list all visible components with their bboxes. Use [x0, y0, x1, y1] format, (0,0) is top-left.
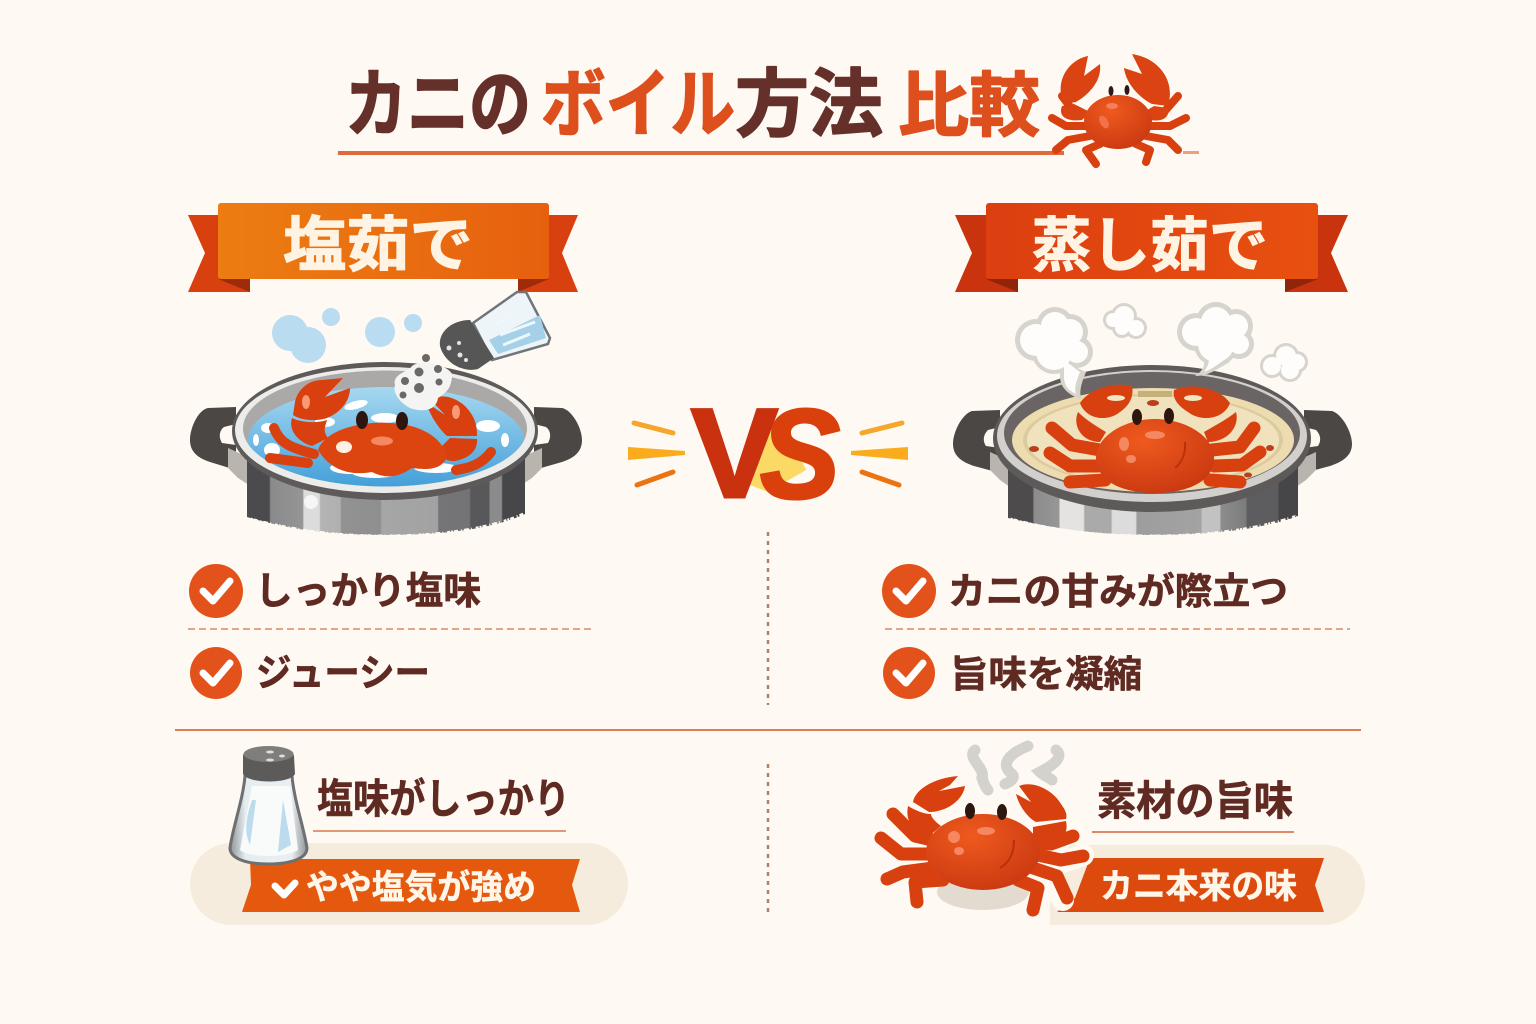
crab halo [1028, 830, 1083, 900]
salt shaker pouring [440, 292, 550, 370]
crab legs [881, 814, 1083, 910]
check icon [190, 647, 242, 699]
pot rim [232, 362, 538, 500]
icon: title crab [1052, 54, 1186, 164]
title: カニの [345, 63, 531, 146]
checklist: salt boil [188, 564, 595, 699]
summary heading: 塩味がしっかり [317, 776, 570, 822]
steam cloud large left [1015, 307, 1093, 400]
summary: salt boil [190, 746, 628, 925]
check text: ジューシー [256, 653, 430, 695]
illustration: boiling pot with crab [190, 292, 582, 538]
ribbon check [275, 883, 295, 895]
VS emblem: V [691, 382, 778, 524]
icon: steam wisps [973, 746, 1059, 790]
summary ribbon [1057, 858, 1324, 912]
title: 比較 [898, 67, 1040, 145]
title: 方法 [735, 63, 883, 146]
VS emblem [628, 382, 908, 525]
banner text: steam boil: 蒸し茹で [1032, 213, 1268, 279]
steam cloud small left [1103, 303, 1147, 339]
icon: crab [881, 776, 1083, 910]
steam cloud small right [1260, 343, 1308, 382]
check text: しっかり塩味 [255, 571, 481, 613]
bubbles [272, 308, 422, 363]
check text: 旨味を凝縮 [950, 654, 1142, 695]
title [345, 63, 1040, 146]
check icon [882, 564, 936, 618]
pot handles [190, 407, 582, 487]
crab on steamer [1050, 385, 1260, 493]
crab left claw [291, 378, 350, 446]
burst rays right [851, 423, 908, 485]
VS emblem: S [760, 383, 840, 525]
burst rays left [628, 423, 685, 485]
summary: steam boil [881, 746, 1365, 925]
pot body [1008, 460, 1298, 535]
check icon [189, 564, 243, 618]
pot handles [953, 410, 1352, 490]
checklist: steam boil [882, 564, 1350, 699]
water [248, 387, 524, 493]
icon: salt shaker [230, 746, 307, 864]
banner: salt boil [188, 203, 578, 292]
summary pill [1050, 845, 1365, 925]
title: ボイル [541, 63, 735, 146]
ribbon text: やや塩気が強め [306, 868, 536, 907]
summary ribbon [242, 859, 580, 912]
crab shell [926, 814, 1040, 890]
crab in water [270, 378, 491, 476]
crab left claw [913, 776, 965, 812]
pot rim [993, 365, 1311, 512]
ribbon text: カニ本来の味 [1100, 868, 1297, 906]
steamer floor [1012, 388, 1294, 492]
illustration: steaming pot with crab [953, 302, 1352, 538]
banner: steam boil [955, 203, 1348, 292]
check text: カニの甘みが際立つ [948, 571, 1288, 612]
steam cloud large right [1177, 302, 1254, 376]
salt grains [400, 354, 442, 398]
check icon [883, 647, 935, 699]
banner text: salt boil: 塩茹で [283, 212, 473, 279]
pot body [247, 450, 525, 535]
salt foam [394, 363, 452, 410]
title underline [338, 151, 1064, 155]
summary heading: 素材の旨味 [1097, 778, 1293, 824]
summary pill [190, 843, 628, 925]
crab right claw [427, 396, 477, 461]
crab right claw [1016, 784, 1066, 822]
